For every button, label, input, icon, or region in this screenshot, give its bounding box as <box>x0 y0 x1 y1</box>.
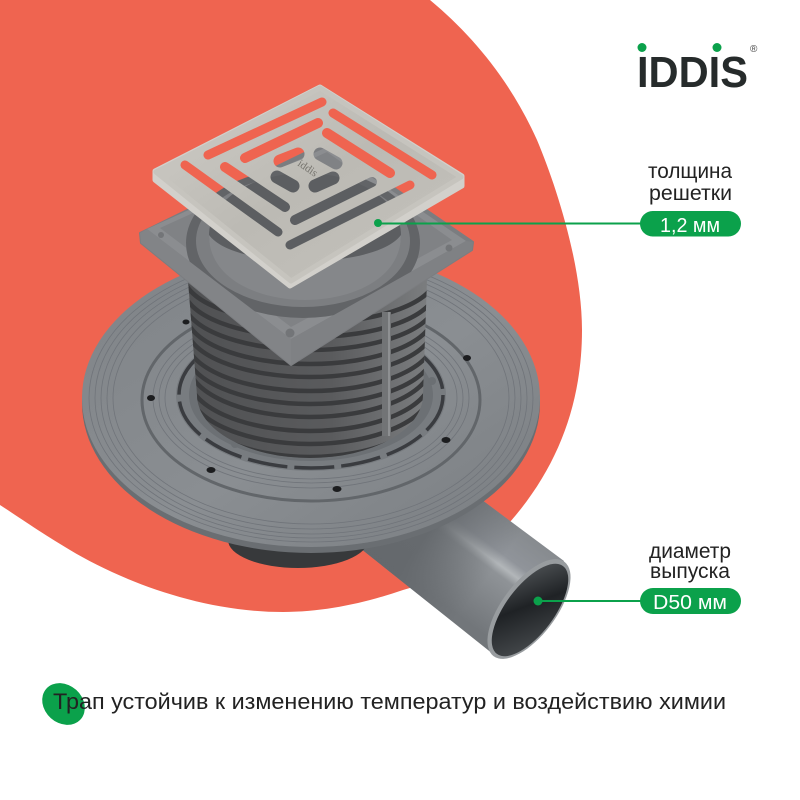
callout: grate thickness <box>374 160 741 237</box>
background blob <box>0 0 582 612</box>
logo: IDDIS <box>637 48 748 97</box>
dark base under flange <box>228 512 368 568</box>
flange <box>82 249 540 553</box>
callout: outlet diameter: диаметр <box>649 540 731 563</box>
callout: grate thickness: решетки <box>649 182 732 205</box>
grate plate <box>155 87 462 286</box>
product: floor drain <box>82 87 586 672</box>
ribbed cylinder <box>184 276 436 458</box>
callout: outlet diameter <box>534 540 741 614</box>
grate logo: iddis <box>295 158 320 179</box>
logo: ® <box>750 44 758 55</box>
callout: outlet diameter: D50 мм <box>653 592 727 614</box>
callout: outlet diameter: выпуска <box>650 560 730 583</box>
outlet pipe <box>360 500 586 672</box>
callout: grate thickness: 1,2 мм <box>660 215 720 237</box>
square frame <box>140 142 473 365</box>
caption: Трап устойчив к изменению температур и воздействию химии <box>53 689 726 714</box>
mounting holes <box>147 320 471 492</box>
icon: green blob behind caption <box>34 674 93 734</box>
callout: grate thickness: толщина <box>648 160 732 183</box>
